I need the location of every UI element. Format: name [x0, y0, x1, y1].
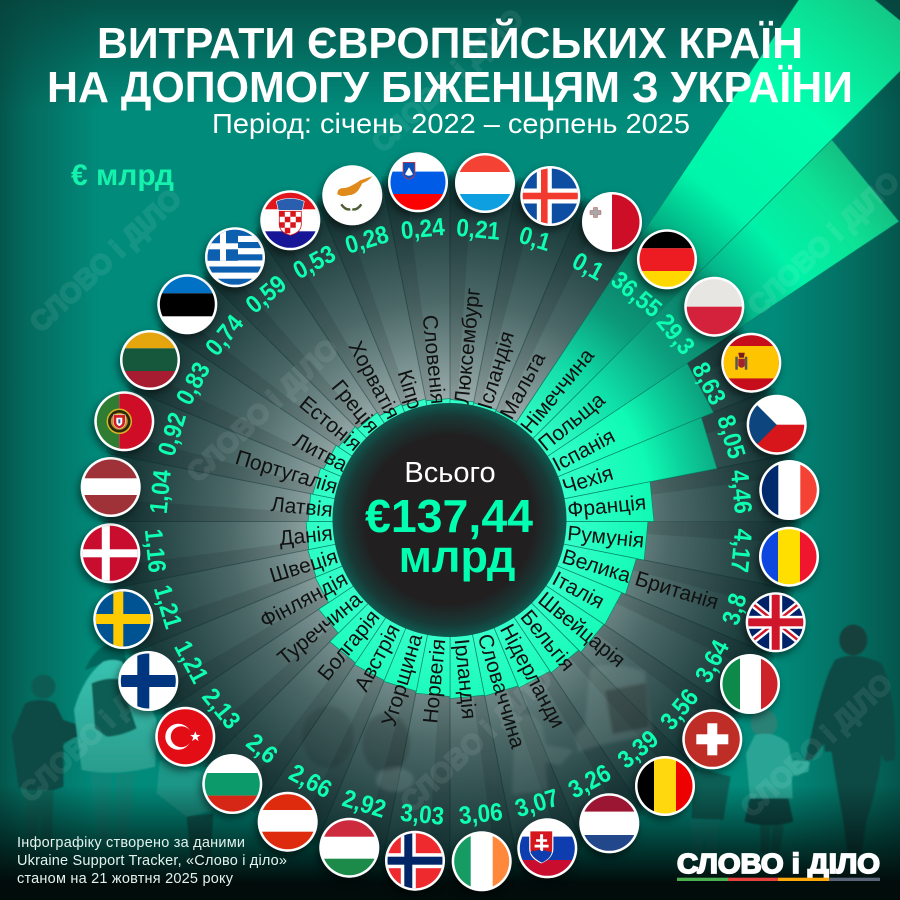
- country names: Ірландія: [450, 638, 480, 720]
- flag: Slovenia: [388, 152, 448, 213]
- centre circle with total: €137,44: [365, 490, 533, 542]
- country names: Болгарія: [313, 606, 384, 685]
- country names: Швеція: [267, 545, 341, 588]
- bar: Іспанія: [437, 363, 713, 546]
- bar: Словаччина: [433, 516, 518, 696]
- flag: Ireland: [452, 831, 512, 891]
- flag: Romania: [759, 527, 819, 587]
- flag: Czechia: [747, 395, 807, 455]
- watermarks: СЛОВО і ДІЛО: [395, 663, 558, 818]
- flag: Estonia: [157, 274, 217, 334]
- country names: Чехія: [560, 462, 616, 499]
- country names: Італія: [548, 567, 608, 614]
- bar: Туреччина: [319, 510, 460, 633]
- country names: Фінляндія: [256, 567, 352, 633]
- country names: Ісландія: [474, 329, 519, 412]
- value labels: 2,13: [196, 683, 246, 735]
- bar: Мальта: [440, 411, 517, 527]
- bar: Греція: [357, 413, 460, 530]
- bar: Італія: [441, 505, 622, 625]
- photo: family on the left: [12, 643, 213, 867]
- bar: Велика Британія: [445, 504, 636, 594]
- bar: Чехія: [442, 417, 717, 547]
- country names: Німеччина: [516, 344, 599, 438]
- value labels: 4,46: [725, 469, 757, 515]
- country names: Кіпр: [393, 367, 426, 412]
- bottom fade: [0, 785, 900, 900]
- flag: Portugal: [94, 391, 154, 451]
- value labels: 0,1: [516, 221, 554, 257]
- value labels: 0,1: [567, 247, 608, 287]
- bar: Швейцарія: [439, 508, 604, 652]
- value labels: 0,24: [400, 213, 447, 245]
- bar: Польща: [416, 140, 899, 562]
- value labels: 3,06: [458, 798, 504, 830]
- value labels: 3,64: [690, 635, 736, 687]
- bar: Данія: [306, 507, 451, 550]
- value labels: 0,74: [200, 309, 250, 361]
- watermarks: СЛОВО і ДІЛО: [14, 653, 177, 808]
- bar: Норвегія: [416, 520, 467, 697]
- flag: Spain: [721, 333, 781, 393]
- country names: Греція: [327, 376, 384, 438]
- value labels: 0,83: [171, 358, 216, 410]
- flag: Lithuania: [120, 330, 180, 390]
- bar: Хорватія: [379, 404, 461, 527]
- country names: Португалія: [233, 446, 340, 499]
- flag: Cyprus: [322, 165, 382, 225]
- chart: green value bars: [306, 0, 900, 699]
- value labels: [139, 213, 757, 831]
- flag: Croatia: [260, 190, 320, 250]
- bar: Австрія: [354, 514, 465, 680]
- flag: Bulgaria: [202, 754, 262, 815]
- chart: grey radial sectors: [98, 170, 802, 873]
- centre circle with total: млрд: [399, 531, 515, 582]
- value labels: 3,26: [564, 759, 616, 805]
- value labels: 1,16: [139, 528, 171, 574]
- bar: Люксембург: [438, 400, 474, 523]
- value labels: 0,28: [342, 220, 392, 260]
- country names: Польща: [534, 388, 610, 456]
- bar: Болгарія: [330, 511, 463, 663]
- value labels: 0,53: [288, 240, 340, 285]
- watermarks: СЛОВО і ДІЛО: [735, 668, 898, 823]
- flag: Switzerland: [682, 709, 742, 769]
- flag: Latvia: [81, 457, 141, 517]
- country names: Словенія: [418, 314, 449, 405]
- bar: Угорщина: [384, 517, 466, 691]
- country names: Данія: [278, 522, 334, 550]
- country names: Швейцарія: [534, 588, 629, 672]
- flag: Belgium: [635, 756, 695, 816]
- country names: Литва: [289, 429, 351, 477]
- flag: France: [759, 460, 819, 520]
- value labels: 3,07: [512, 784, 562, 823]
- value labels: 1,21: [168, 636, 214, 688]
- watermarks: СЛОВО і ДІЛО: [24, 183, 187, 338]
- bar: Кіпр: [402, 399, 462, 525]
- flag: Sweden: [93, 589, 153, 649]
- country names: Естонія: [295, 392, 366, 456]
- source note: Ukraine Support Tracker, «Слово і діло»: [17, 853, 287, 869]
- country names: Австрія: [350, 620, 405, 695]
- flag: Denmark: [80, 523, 140, 583]
- value labels: 0,59: [240, 270, 292, 320]
- bar: Франція: [448, 482, 654, 541]
- country names: Бельгія: [516, 606, 579, 676]
- photo: figures showing through the sectors: [302, 665, 652, 795]
- bar: Швеція: [308, 508, 454, 577]
- country names: Туреччина: [273, 588, 367, 670]
- flag: Netherlands: [579, 793, 639, 853]
- country names: Велика Британія: [559, 545, 721, 614]
- value labels: 1,04: [145, 468, 177, 515]
- title: НА ДОПОМОГУ БІЖЕНЦЯМ З УКРАЇНИ: [47, 63, 853, 112]
- country names: Хорватія: [344, 337, 404, 423]
- centre circle with total: Всього: [404, 457, 496, 489]
- flag: Greece: [205, 227, 265, 287]
- flag: United Kingdom: [746, 592, 806, 652]
- flag: Poland: [684, 277, 744, 337]
- value labels: 8,63: [686, 358, 731, 410]
- country names: Румунія: [566, 522, 645, 553]
- country names: Норвегія: [419, 638, 450, 725]
- value labels: 29,3: [650, 309, 700, 360]
- bar: Словенія: [426, 399, 462, 523]
- bar: Бельгія: [436, 510, 579, 673]
- source note: станом на 21 жовтня 2025 року: [17, 871, 234, 887]
- value labels: 0,21: [455, 214, 501, 246]
- bar: Латвія: [308, 494, 451, 535]
- country names: Латвія: [270, 493, 334, 522]
- value labels: 36,55: [605, 266, 667, 323]
- centre circle with total: [332, 403, 566, 637]
- value labels: 3,56: [655, 684, 705, 735]
- source note: [17, 835, 287, 887]
- country names: Угорщина: [378, 631, 427, 729]
- flag: Slovakia: [517, 818, 577, 878]
- country names: Мальта: [496, 348, 550, 423]
- country names: Іспанія: [549, 425, 619, 476]
- unit label: € млрд: [71, 159, 174, 192]
- watermarks: СЛОВО і ДІЛО: [181, 333, 344, 488]
- value labels: 4,17: [725, 527, 757, 574]
- flag: Malta: [582, 192, 642, 252]
- value labels: 3,39: [612, 725, 664, 775]
- bar: Литва: [323, 445, 456, 533]
- flag: Norway: [385, 831, 445, 891]
- country names: Нідерланди: [495, 620, 569, 732]
- bar: Португалія: [313, 468, 454, 535]
- value labels: 2,6: [241, 728, 283, 770]
- value labels: 2,92: [339, 784, 389, 824]
- source note: Інфографіку створено за даними: [17, 835, 245, 851]
- bar: Фінляндія: [315, 509, 457, 603]
- value labels: 3,8: [717, 590, 753, 628]
- flag: Turkey: [155, 707, 215, 767]
- value labels: 8,05: [711, 412, 751, 462]
- country names: Словаччина: [473, 631, 529, 751]
- flag: Luxembourg: [455, 153, 515, 213]
- bar: Естонія: [339, 427, 458, 532]
- flags ring: [80, 152, 819, 891]
- flag: Italy: [720, 654, 780, 714]
- flag: Germany: [637, 229, 697, 290]
- flag: Austria: [258, 792, 318, 852]
- bar: Нідерланди: [434, 513, 550, 688]
- subtitle: Період: січень 2022 – серпень 2025: [212, 108, 690, 139]
- bar: Німеччина: [399, 0, 900, 563]
- country names: [233, 287, 721, 751]
- flag: Hungary: [319, 818, 379, 878]
- country names: Франція: [566, 491, 647, 522]
- value labels: 3,03: [399, 799, 445, 831]
- bar: Ісландія: [439, 403, 496, 525]
- flag: Iceland: [520, 166, 580, 226]
- country names: Люксембург: [451, 287, 485, 405]
- title: ВИТРАТИ ЄВРОПЕЙСЬКИХ КРАЇН: [97, 17, 803, 68]
- value labels: 2,66: [284, 759, 336, 804]
- watermarks: СЛОВО і ДІЛО: [366, 3, 529, 158]
- photo: family on the right: [691, 625, 895, 860]
- value labels: 1,21: [148, 582, 187, 632]
- title: [47, 17, 853, 112]
- bar: Румунія: [448, 502, 648, 560]
- bar: Ірландія: [433, 520, 484, 699]
- flag: Finland: [118, 651, 178, 711]
- value labels: 0,92: [153, 409, 192, 459]
- logo: СЛОВО і ДІЛО: [677, 848, 880, 879]
